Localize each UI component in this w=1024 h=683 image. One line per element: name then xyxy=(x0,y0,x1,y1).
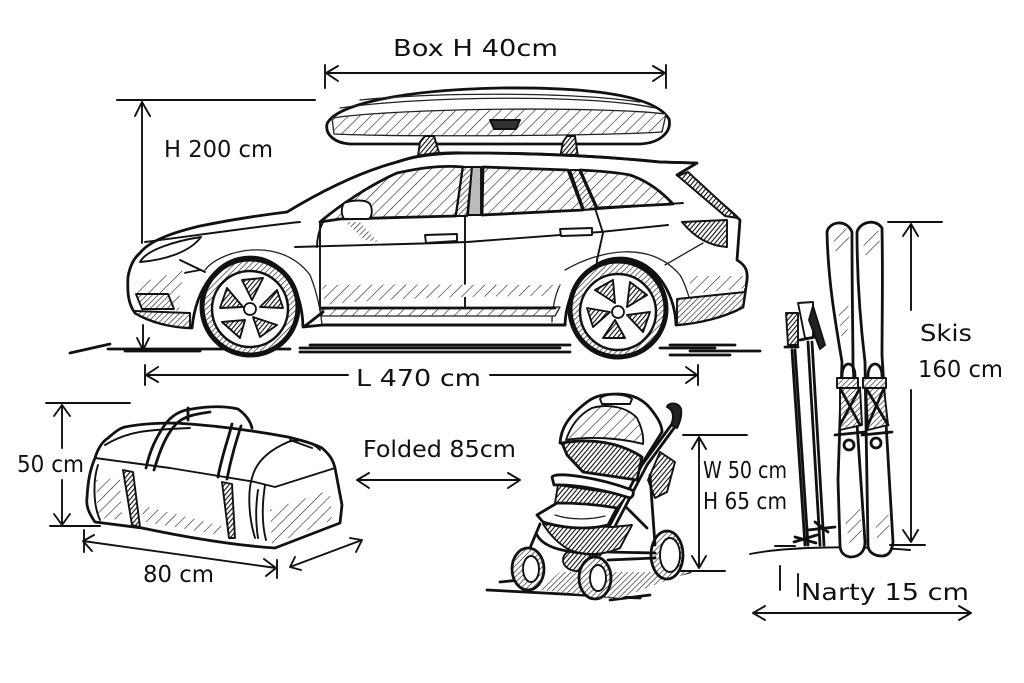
arrow: stroller height xyxy=(680,435,747,571)
bag seams and strap xyxy=(94,428,335,540)
label: ski height: Skis xyxy=(920,321,972,347)
ski width dimension xyxy=(753,566,971,620)
bumper bar xyxy=(552,475,633,498)
canopy hatched panel xyxy=(566,406,643,444)
right binding xyxy=(863,378,888,430)
skis and poles xyxy=(750,222,910,557)
label: bag length: 80 cm xyxy=(143,562,214,588)
handles xyxy=(146,407,252,479)
bag length dimension xyxy=(83,530,362,588)
canopy handle xyxy=(600,394,632,404)
tail light xyxy=(682,220,727,247)
rear wheel and hidden wheel xyxy=(563,549,591,571)
c-pillar xyxy=(570,170,596,210)
right pole xyxy=(808,342,824,545)
back bag xyxy=(648,452,675,498)
box width dimension xyxy=(325,36,666,88)
car body xyxy=(128,153,747,328)
ground shadow xyxy=(70,344,760,355)
headlight xyxy=(140,237,201,262)
duffel bag xyxy=(87,407,342,548)
fog lamp xyxy=(136,294,174,309)
wheel arches xyxy=(205,243,703,325)
bag hatching xyxy=(96,478,332,545)
car height dimension xyxy=(117,100,315,350)
arrow: ski width xyxy=(753,566,971,620)
left ski xyxy=(827,223,865,557)
car xyxy=(70,153,760,357)
arrow: folded size xyxy=(357,473,520,488)
folded stroller dimension xyxy=(357,437,520,488)
right ski xyxy=(857,222,893,556)
left binding xyxy=(837,378,862,430)
ski hatching xyxy=(833,226,890,545)
canopy underside xyxy=(562,441,642,480)
rear bumper xyxy=(677,292,745,325)
rear hatch glass xyxy=(678,172,738,218)
stroller xyxy=(487,394,690,600)
arrow: bag depth xyxy=(290,538,362,570)
arrow: bag height xyxy=(46,403,130,526)
sill hatching xyxy=(322,285,560,305)
arrow: ski height xyxy=(888,222,942,545)
ski height dimension xyxy=(888,222,1003,545)
label: car length: L 470 cm xyxy=(356,366,481,392)
b-pillar xyxy=(456,167,472,216)
arrow: car height xyxy=(117,100,315,350)
basket xyxy=(543,524,632,554)
arrow: car length xyxy=(145,365,698,385)
label: box size: Box H 40cm xyxy=(393,36,558,62)
bag body xyxy=(87,423,342,548)
rear window xyxy=(482,167,583,215)
label: bag height: 50 cm xyxy=(17,452,84,478)
seat xyxy=(537,503,617,528)
front wheel xyxy=(202,259,298,355)
bag height dimension xyxy=(17,403,130,526)
mirror xyxy=(342,200,372,219)
label: stroller size: W 50 cm xyxy=(703,458,787,484)
mirror shadow hatching xyxy=(345,222,378,242)
bag straps xyxy=(123,470,140,527)
canopy xyxy=(560,394,662,462)
stroller dimension: H 65 cm xyxy=(703,489,787,515)
roof rails line xyxy=(397,153,695,163)
door handles xyxy=(425,234,457,243)
frame xyxy=(530,424,677,560)
label: ski width: Narty 15 cm xyxy=(801,580,969,606)
left pole xyxy=(792,350,808,545)
front wheels xyxy=(512,548,544,590)
front bumper hatch xyxy=(135,270,185,312)
lower front bumper xyxy=(135,311,190,328)
arrow: box width xyxy=(325,65,666,88)
front window xyxy=(320,166,463,222)
car length dimension xyxy=(145,365,698,392)
rear wheel xyxy=(570,261,666,357)
arrow: bag length xyxy=(83,530,277,578)
label: folded size: Folded 85cm xyxy=(363,437,516,463)
back panel xyxy=(555,485,627,510)
body lines xyxy=(145,203,683,312)
rear quarter window xyxy=(580,170,673,208)
roof box xyxy=(327,88,669,157)
handle grip xyxy=(667,403,681,428)
ground line xyxy=(750,546,910,554)
label: car height: H 200 cm xyxy=(164,137,273,163)
ski height dimension: 160 cm xyxy=(918,357,1003,383)
ground shadow xyxy=(487,572,690,600)
stroller dimension xyxy=(680,435,787,571)
